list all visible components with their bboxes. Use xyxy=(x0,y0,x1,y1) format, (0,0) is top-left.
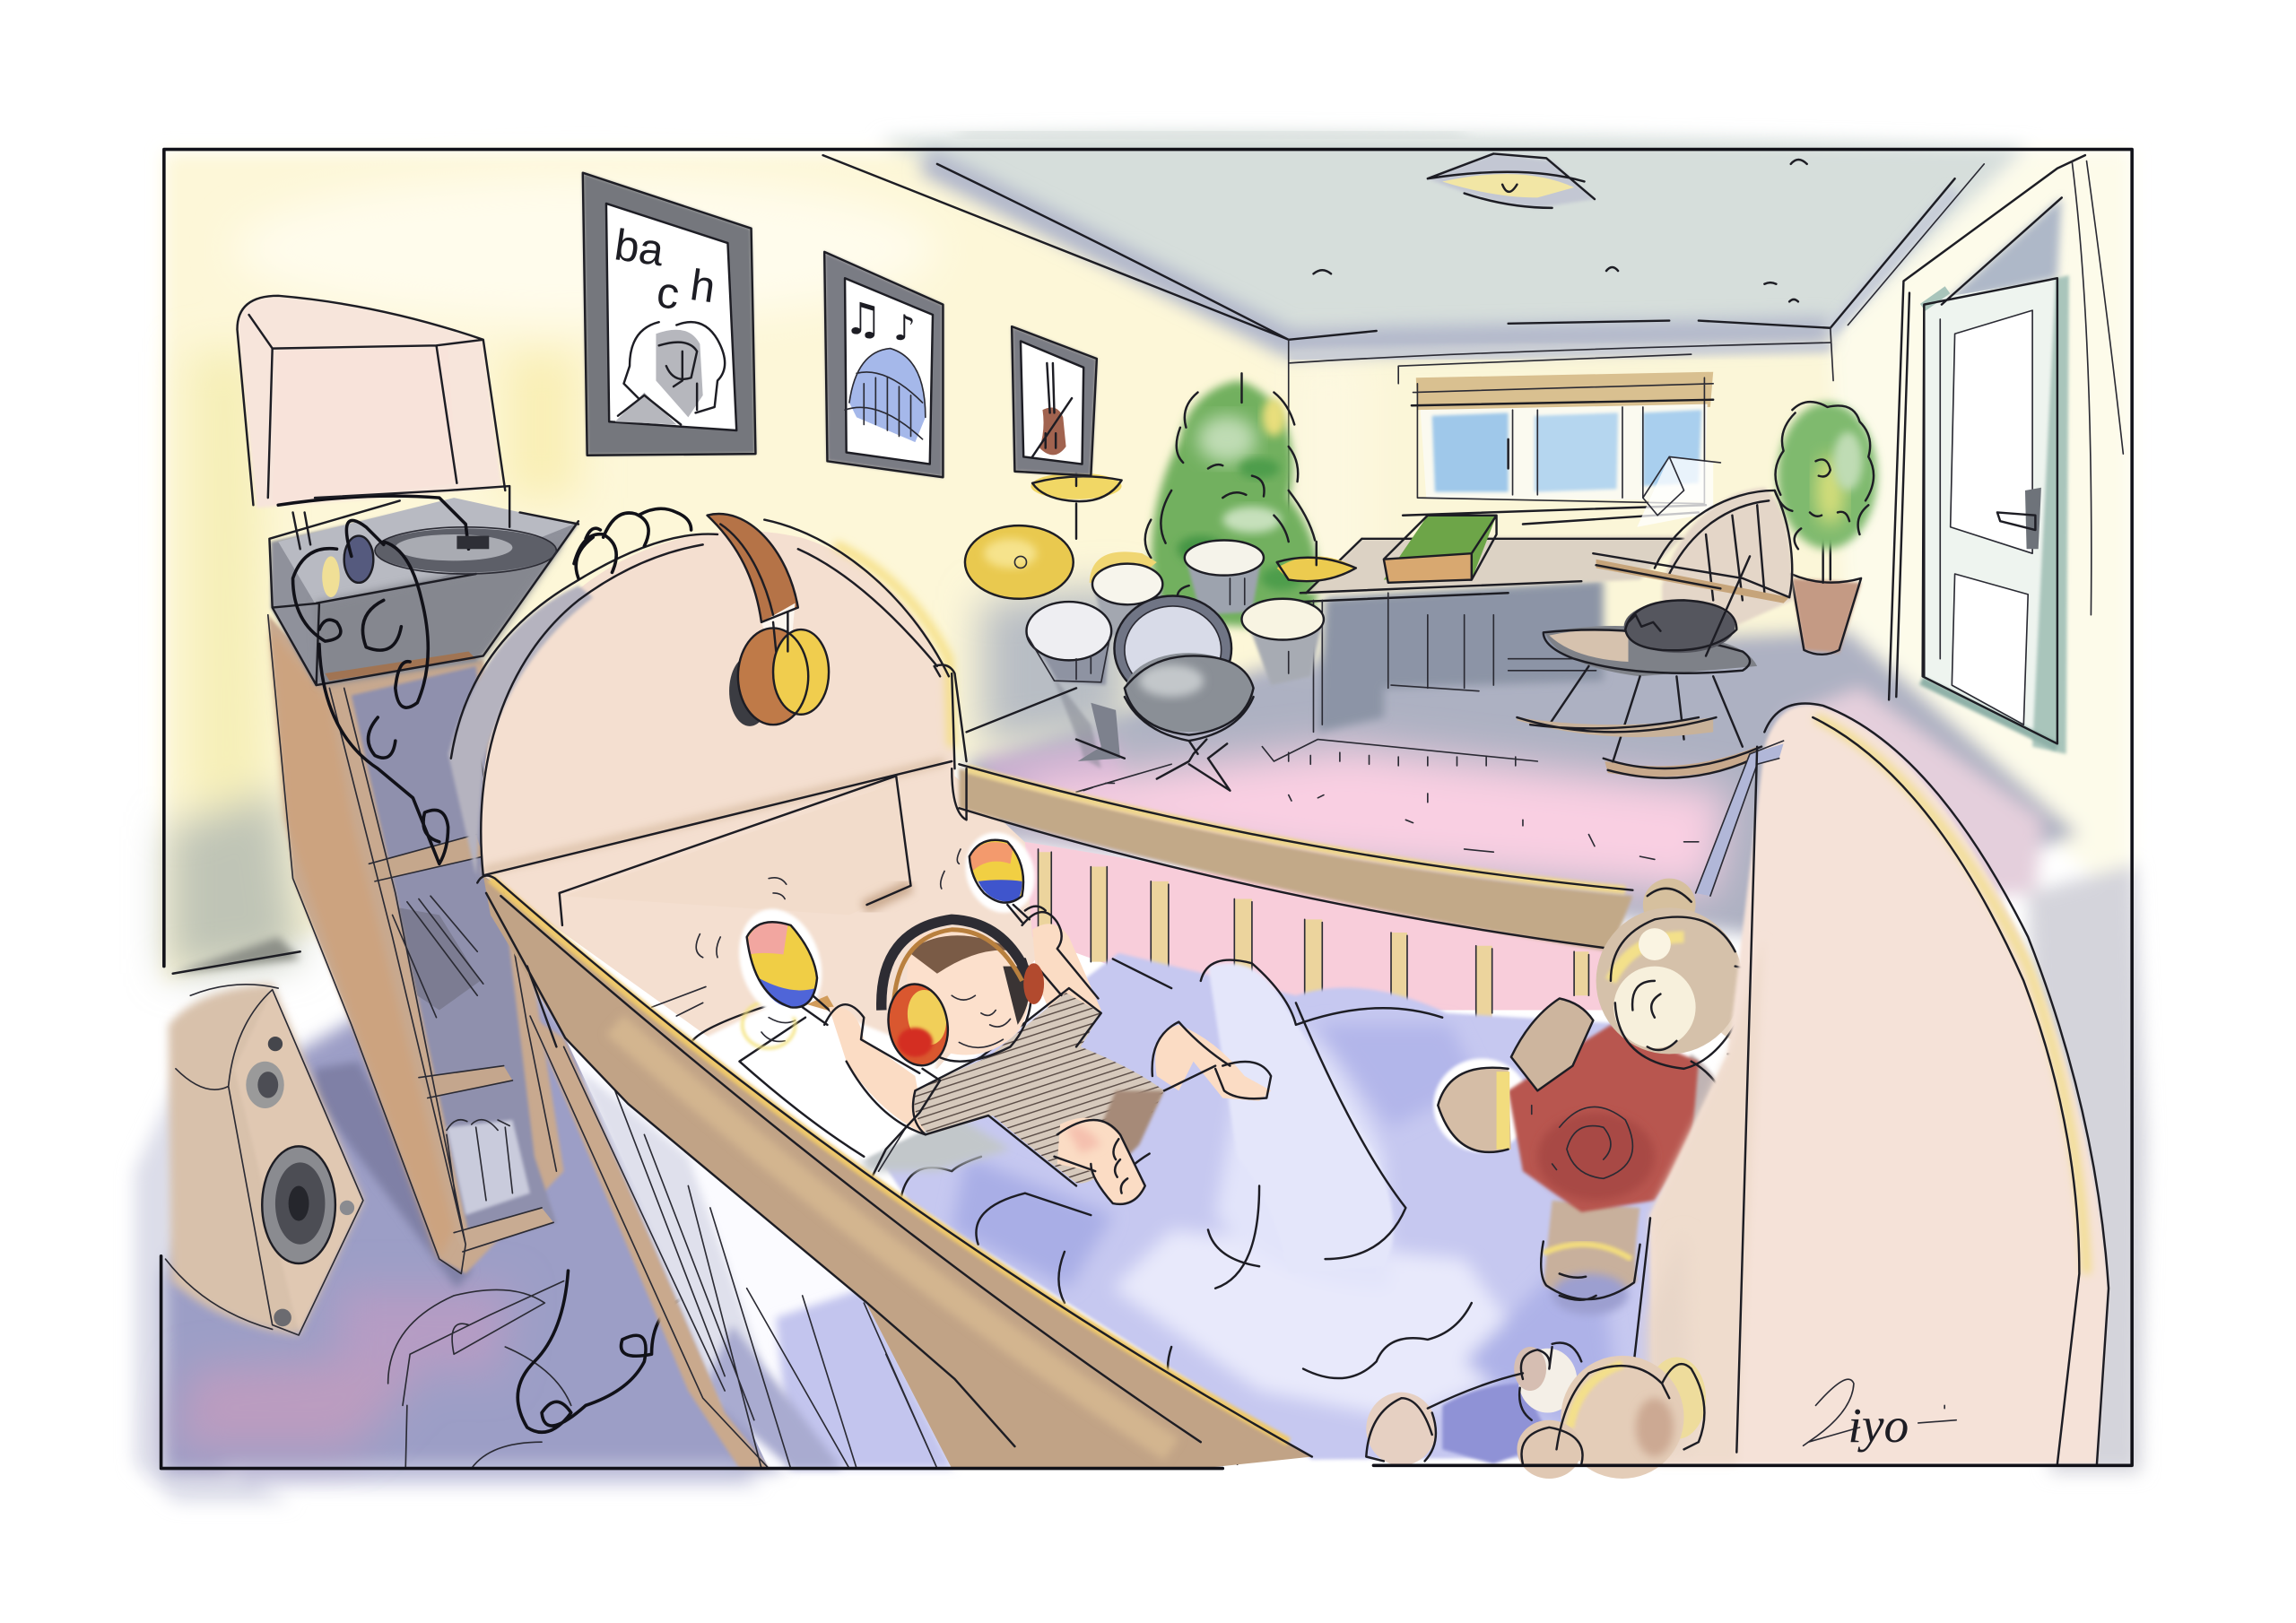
crib footboard xyxy=(1632,703,2109,1464)
framed picture: Bach portrait: ba xyxy=(612,221,667,275)
lower leg and foot xyxy=(1057,1118,1145,1204)
ceiling lines and crown moulding xyxy=(823,155,1984,586)
shake marks xyxy=(652,849,961,1016)
record player with open lid xyxy=(237,296,578,864)
baby with headphones and maracas xyxy=(652,822,1271,1204)
green tree behind the drums xyxy=(1145,373,1318,629)
near crib rail xyxy=(477,875,1312,1469)
headphones hanging on the headboard xyxy=(708,514,829,726)
ink frame lines xyxy=(161,150,2132,1469)
head xyxy=(907,929,1029,1055)
arms xyxy=(829,1007,926,1134)
pink carpet seen through the crib slats xyxy=(1025,842,1608,1011)
baby headphones xyxy=(882,919,1032,1011)
diaper xyxy=(1095,1090,1164,1168)
artist signature xyxy=(1804,1379,1956,1454)
potted plant by the door xyxy=(1775,402,1877,655)
crib headboard xyxy=(448,508,1042,1069)
framed picture: violin xyxy=(1012,326,1097,476)
ceiling lamp xyxy=(1428,153,1595,208)
door with casing xyxy=(1889,155,2123,754)
far crib rail with slats xyxy=(952,764,1632,1019)
framed picture: Bach portrait: h xyxy=(687,261,718,312)
framed picture: colosseum and notes: ♫ xyxy=(843,293,883,344)
teddy bear on the mattress xyxy=(1433,879,1780,1315)
mattress and blue blanket xyxy=(864,953,1735,1464)
carpet marks and rug edge xyxy=(1076,740,1699,859)
right maraca xyxy=(954,822,1046,923)
desk with green book xyxy=(1300,516,1684,732)
artist signature: iyo xyxy=(1848,1399,1909,1454)
framed picture: colosseum and notes xyxy=(824,252,943,477)
drum kit with cymbals xyxy=(965,465,1357,791)
raised leg xyxy=(1155,1025,1271,1101)
left maraca xyxy=(726,898,838,1028)
rocking chair with sleeping cat xyxy=(1517,488,1793,778)
shelf shadow on the wall and floor xyxy=(164,150,472,1289)
records and tangled cable on the floor xyxy=(388,1215,750,1469)
torso xyxy=(914,993,1164,1184)
speaker xyxy=(165,984,363,1335)
small bear in the foreground xyxy=(1366,1342,1706,1479)
framed picture: Bach portrait: c xyxy=(654,268,683,319)
window with blind xyxy=(1398,354,1720,527)
background: watercolour washes of walls, ceiling and floor xyxy=(135,133,2146,1502)
framed picture: colosseum and notes: ♪ xyxy=(893,308,916,349)
pillow xyxy=(691,995,937,1171)
framed picture: Bach portrait xyxy=(583,173,755,456)
record shelf xyxy=(268,615,564,1273)
